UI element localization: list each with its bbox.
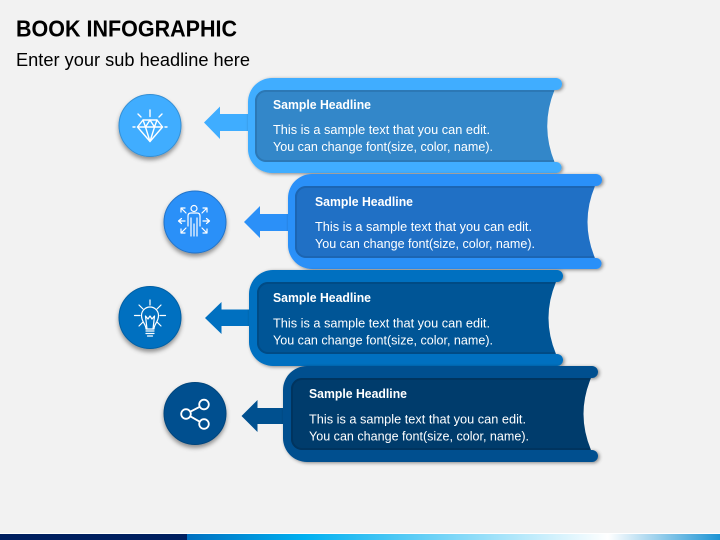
panel: book 1 xyxy=(204,78,562,173)
panel: book 2 xyxy=(244,174,602,269)
book 2 body: This is a sample text that you can edit. xyxy=(315,219,532,234)
panel: book 3 xyxy=(205,270,563,366)
book 2 cover xyxy=(288,174,602,269)
arrow 3 xyxy=(205,302,252,334)
book 4 body: You can change font(size, color, name). xyxy=(309,428,529,444)
title: BOOK INFOGRAPHIC xyxy=(16,16,237,42)
book 3 body: You can change font(size, color, name). xyxy=(273,332,493,348)
arrow 1 xyxy=(204,106,250,139)
icon: person with arrows xyxy=(164,191,226,253)
book 1 body: This is a sample text that you can edit. xyxy=(273,122,490,137)
book 2 page xyxy=(295,186,595,258)
book 2 body: You can change font(size, color, name). xyxy=(315,236,535,251)
book 3 body xyxy=(273,316,493,348)
footer bar xyxy=(0,533,720,540)
book 2 body xyxy=(315,219,535,251)
book 4 body: This is a sample text that you can edit. xyxy=(309,412,526,426)
book 1 body xyxy=(273,122,493,154)
book 3 body: This is a sample text that you can edit. xyxy=(273,316,490,330)
book 1 page xyxy=(255,90,554,162)
book 3 cover xyxy=(249,270,563,366)
book 4 headline: Sample Headline xyxy=(309,387,407,401)
arrow 2 xyxy=(244,206,290,238)
book 1 headline: Sample Headline xyxy=(273,98,371,112)
icon: share xyxy=(164,382,226,444)
book 4 page xyxy=(291,378,591,450)
icon: light bulb xyxy=(119,286,181,348)
book 1 body: You can change font(size, color, name). xyxy=(273,139,493,154)
book 4 cover xyxy=(283,366,598,462)
book 3 page xyxy=(257,282,556,354)
subtitle: Enter your sub headline here xyxy=(16,50,250,70)
panel: book 4 xyxy=(242,366,598,462)
book 1 cover xyxy=(248,78,562,173)
book 2 headline: Sample Headline xyxy=(315,195,413,209)
arrow 4 xyxy=(242,400,286,432)
book 3 headline: Sample Headline xyxy=(273,291,371,305)
book 4 body xyxy=(309,412,529,444)
icon: diamond xyxy=(119,94,181,156)
